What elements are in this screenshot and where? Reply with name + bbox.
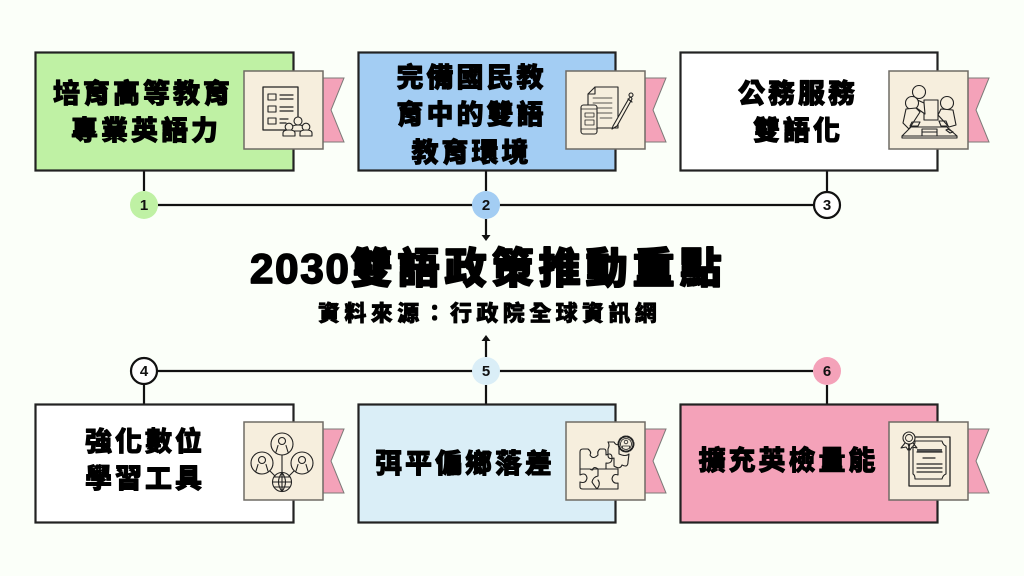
text: item 2 label: 教育環境: [412, 137, 532, 168]
text: item 2 label: [396, 62, 546, 168]
arrow: down to title: [482, 219, 490, 241]
text: item 4 label: [85, 426, 205, 494]
text: item 4 label: 強化數位: [85, 426, 205, 457]
panel: item 1: [36, 52, 344, 170]
panel: item 6: [680, 404, 989, 522]
marker: number 2: [472, 191, 500, 219]
text: item 1 label: 培育高等教育: [53, 78, 233, 109]
text: item 1 label: [53, 78, 233, 146]
panel: item 2: [358, 52, 666, 170]
text: item 6 label: 擴充英檢量能: [698, 445, 878, 476]
source line: 資料來源：行政院全球資訊網: [318, 301, 661, 326]
text: item 1 label: 專業英語力: [71, 116, 221, 146]
text: item 4 label: 學習工具: [85, 464, 205, 494]
text: item 2 label: 完備國民教: [396, 62, 546, 93]
marker: number 5: [472, 357, 500, 385]
text: item 5 label: 弭平偏鄉落差: [375, 449, 555, 479]
icon: people network and globe: [244, 422, 344, 500]
text: item 2 label: 育中的雙語: [396, 99, 546, 130]
panel: item 5: [358, 404, 666, 522]
marker: number 6: 6: [823, 363, 831, 380]
icon: meeting table: [889, 71, 989, 149]
text: item 3 label: 公務服務: [738, 79, 858, 109]
title: 2030雙語政策推動重點: [250, 245, 727, 292]
text: item 3 label: [738, 79, 858, 146]
marker: number 6: [813, 357, 841, 385]
marker: number 4: [131, 358, 157, 384]
icon: certificate: [889, 422, 989, 500]
marker: number 2: 2: [482, 197, 490, 214]
marker: number 3: 3: [823, 197, 831, 214]
arrow: up to source line: [482, 335, 490, 357]
icon: puzzle and gear: [566, 422, 666, 500]
marker: number 1: [130, 191, 158, 219]
marker: number 4: 4: [140, 363, 149, 380]
marker: number 1: 1: [140, 197, 148, 214]
icon: checklist and people: [244, 71, 344, 149]
icon: document, phone and pen: [566, 71, 666, 149]
marker: number 3: [814, 192, 840, 218]
text: item 3 label: 雙語化: [753, 116, 843, 146]
panel: item 4: [36, 404, 344, 522]
panel: item 3: [680, 52, 989, 170]
marker: number 5: 5: [482, 363, 490, 380]
